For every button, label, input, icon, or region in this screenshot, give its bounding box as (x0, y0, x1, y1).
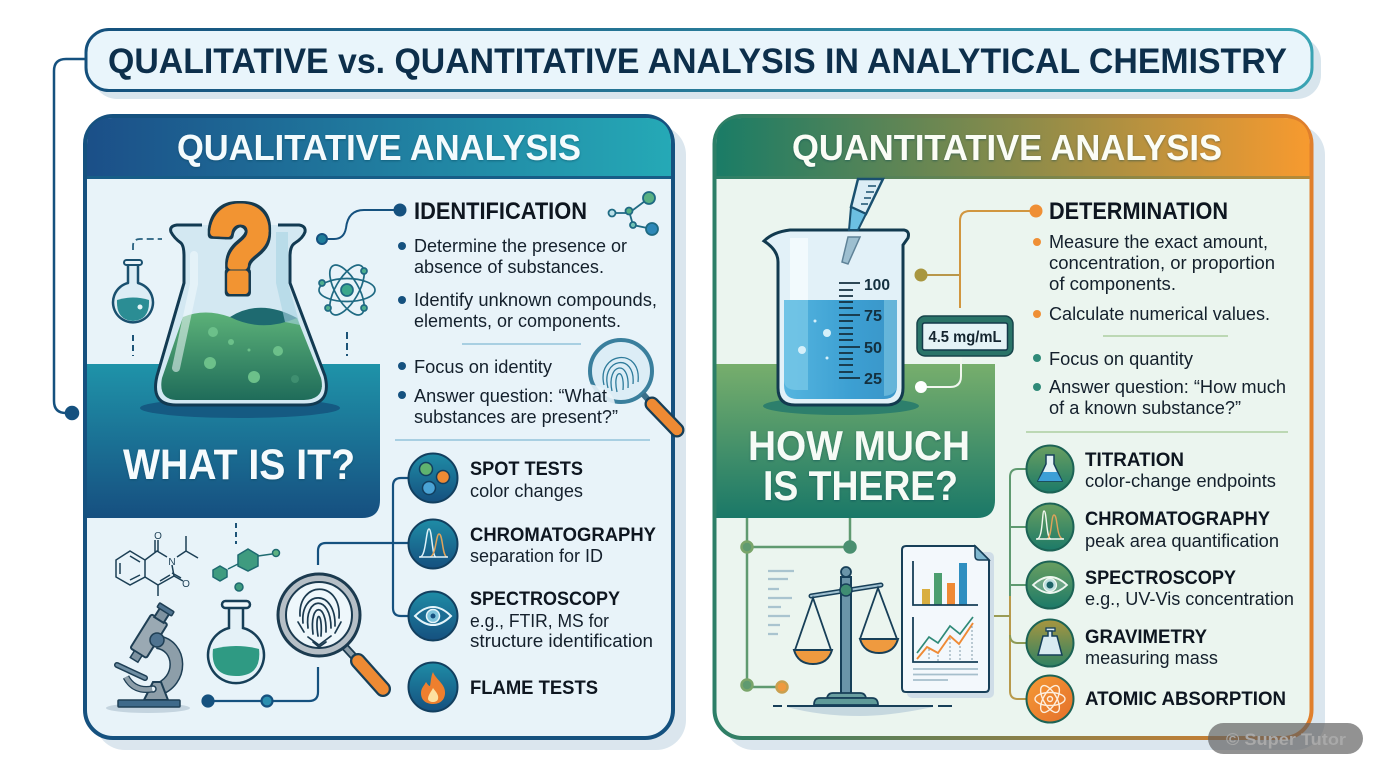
method: spot tests: SPOT TESTS (470, 458, 583, 480)
panel: qualitative analysis (85, 116, 686, 750)
method: chromatography (408, 520, 656, 568)
connector tree: quantitative methods (993, 469, 1026, 699)
diagram: line-drawn compound structure (116, 531, 198, 596)
diagram: line-drawn compound structure: O (154, 531, 162, 542)
connector to determination (916, 206, 1042, 392)
bullets: determination: concentration, or proportion (1049, 252, 1275, 273)
method: atomic absorption (1026, 676, 1286, 722)
method: atomic absorption: ATOMIC ABSORPTION (1085, 688, 1286, 710)
decorative text lines (768, 571, 794, 634)
icon: beaker with pipette: 100 (864, 277, 890, 294)
panel: quantitative analysis (714, 116, 1325, 750)
header bar (87, 118, 671, 178)
bullets: identification: Focus on identity (414, 356, 553, 377)
method: chromatography: separation for ID (470, 545, 603, 566)
title text: QUALITATIVE vs. QUANTITATIVE ANALYSIS IN ANALYTICAL CHEMISTRY (108, 41, 1287, 81)
readout: concentration (917, 316, 1013, 356)
icon: large flask with question mark (140, 184, 340, 418)
band question: WHAT IS IT? (123, 441, 355, 489)
icon: beaker with pipette: 75 (864, 308, 882, 325)
band: what is it (87, 364, 380, 518)
question mark: ? (209, 184, 271, 316)
header bar (716, 118, 1310, 178)
bullets: identification: absence of substances. (414, 256, 604, 277)
method: gravimetry (1026, 620, 1218, 668)
icon: report with charts (902, 546, 994, 698)
icon: round flask (208, 601, 264, 683)
connector: title to qualitative panel (54, 59, 85, 419)
method: spectroscopy: SPECTROSCOPY (1085, 567, 1236, 589)
bar chart (913, 561, 978, 605)
method: chromatography: CHROMATOGRAPHY (470, 524, 656, 546)
method: chromatography: peak area quantification (1085, 530, 1279, 551)
method: flame tests: FLAME TESTS (470, 677, 598, 699)
method: spectroscopy (408, 588, 653, 651)
watermark (1208, 723, 1363, 754)
bullets: determination: Measure the exact amount, (1049, 231, 1268, 252)
method: flame tests (408, 662, 598, 712)
line chart (913, 617, 978, 662)
method: chromatography: CHROMATOGRAPHY (1085, 508, 1270, 530)
band question: IS THERE? (763, 462, 958, 509)
bullets: identification: Answer question: “What (414, 385, 607, 406)
method: gravimetry: GRAVIMETRY (1085, 626, 1207, 648)
icon: small magnifier with fingerprint (555, 340, 677, 430)
method: spot tests (408, 454, 583, 502)
method: titration (1026, 446, 1276, 492)
method: spectroscopy: SPECTROSCOPY (470, 588, 620, 610)
method: spectroscopy (1026, 562, 1294, 609)
method: spot tests: color changes (470, 480, 583, 501)
icon: beaker with pipette: 50 (864, 340, 882, 357)
icon: balance scale (773, 567, 952, 716)
band question: HOW MUCH (748, 422, 970, 469)
method: spectroscopy: structure identification (470, 630, 653, 651)
readout: concentration: 4.5 mg/mL (928, 329, 1002, 346)
icon: green molecule (213, 523, 280, 591)
method: titration: color-change endpoints (1085, 470, 1276, 491)
icon: molecule network (608, 192, 658, 235)
method: spectroscopy: e.g., UV-Vis concentration (1085, 588, 1294, 609)
diagram: line-drawn compound structure: N (168, 557, 176, 568)
icon: microscope (106, 602, 190, 713)
bullets: identification (395, 235, 657, 441)
band question (748, 422, 970, 509)
bullets: determination: Calculate numerical values. (1049, 303, 1270, 324)
bullets: identification: elements, or components. (414, 310, 621, 331)
heading: determination: DETERMINATION (1049, 198, 1228, 225)
title banner (86, 30, 1321, 99)
icon: beaker with pipette: 25 (864, 371, 882, 388)
connector: lower-left green network (742, 518, 856, 692)
bullets: determination (1026, 231, 1288, 433)
bullets: determination: of components. (1049, 273, 1176, 294)
bullets: determination: Answer question: “How much (1049, 376, 1286, 397)
method: gravimetry: measuring mass (1085, 647, 1218, 668)
method: titration: TITRATION (1085, 449, 1184, 471)
icon: beaker with pipette (763, 179, 919, 415)
icon: large magnifier with fingerprint (278, 574, 383, 689)
watermark: © Super Tutor (1226, 730, 1346, 749)
heading: identification: IDENTIFICATION (414, 198, 587, 225)
band: how much (716, 364, 995, 518)
bullets: identification: substances are present?” (414, 406, 618, 427)
header text: QUALITATIVE ANALYSIS (177, 127, 581, 168)
bullets: identification: Identify unknown compounds, (414, 289, 657, 310)
connector to identification (317, 204, 406, 244)
diagram: line-drawn compound structure: O (182, 579, 190, 590)
bullets: determination: Focus on quantity (1049, 348, 1194, 369)
graduated scale (839, 283, 860, 378)
pipette (842, 179, 883, 264)
method: chromatography (1026, 504, 1279, 551)
bullets: identification: Determine the presence or (414, 235, 627, 256)
icon: small flask (113, 239, 162, 356)
connector tree: qualitative methods (202, 478, 408, 706)
bullets: determination: of a known substance?” (1049, 397, 1241, 418)
method: spectroscopy: e.g., FTIR, MS for (470, 610, 609, 631)
header text: QUANTITATIVE ANALYSIS (792, 127, 1222, 168)
icon: atom (319, 260, 375, 356)
